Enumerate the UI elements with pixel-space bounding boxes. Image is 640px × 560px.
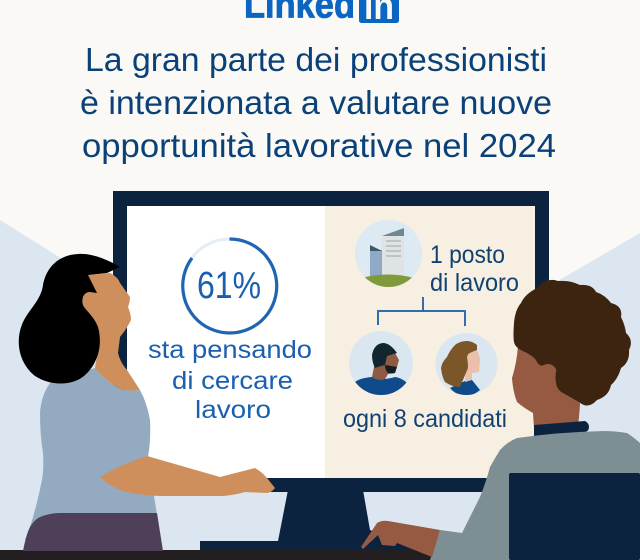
panel: job and candidates xyxy=(325,206,535,478)
monitor frame xyxy=(113,191,549,492)
face xyxy=(512,340,580,428)
hair xyxy=(514,280,631,406)
job label: 1 posto xyxy=(430,241,505,269)
candidates label: ogni 8 candidati xyxy=(343,405,507,433)
floor xyxy=(0,550,640,560)
skin xyxy=(82,273,140,391)
monitor stand xyxy=(200,490,432,550)
caption xyxy=(148,336,312,424)
title: La gran parte dei professionisti xyxy=(85,41,547,78)
background wall xyxy=(0,220,640,560)
skirt xyxy=(23,513,163,551)
title xyxy=(80,41,556,164)
title: è intenzionata a valutare nuove xyxy=(80,84,552,121)
caption: sta pensando xyxy=(148,336,312,364)
shirt xyxy=(25,368,157,540)
job label: di lavoro xyxy=(430,269,519,297)
hand xyxy=(361,521,440,557)
arm xyxy=(100,456,275,496)
percentage: 61% xyxy=(197,265,261,307)
panel: 61 percent statistic xyxy=(127,206,325,478)
person: man xyxy=(361,280,640,560)
icon: female candidate xyxy=(436,333,498,396)
chair xyxy=(509,473,640,560)
icon: building xyxy=(355,220,422,292)
collar xyxy=(534,421,589,437)
caption: di cercare xyxy=(172,367,293,395)
job label xyxy=(430,241,519,297)
progress ring xyxy=(182,239,277,333)
person: woman xyxy=(19,254,275,551)
hair xyxy=(19,254,120,384)
caption: lavoro xyxy=(195,396,271,424)
connector xyxy=(378,297,465,326)
icon: male candidate xyxy=(349,331,413,396)
title: opportunità lavorative nel 2024 xyxy=(82,127,556,164)
sweater xyxy=(430,431,640,560)
